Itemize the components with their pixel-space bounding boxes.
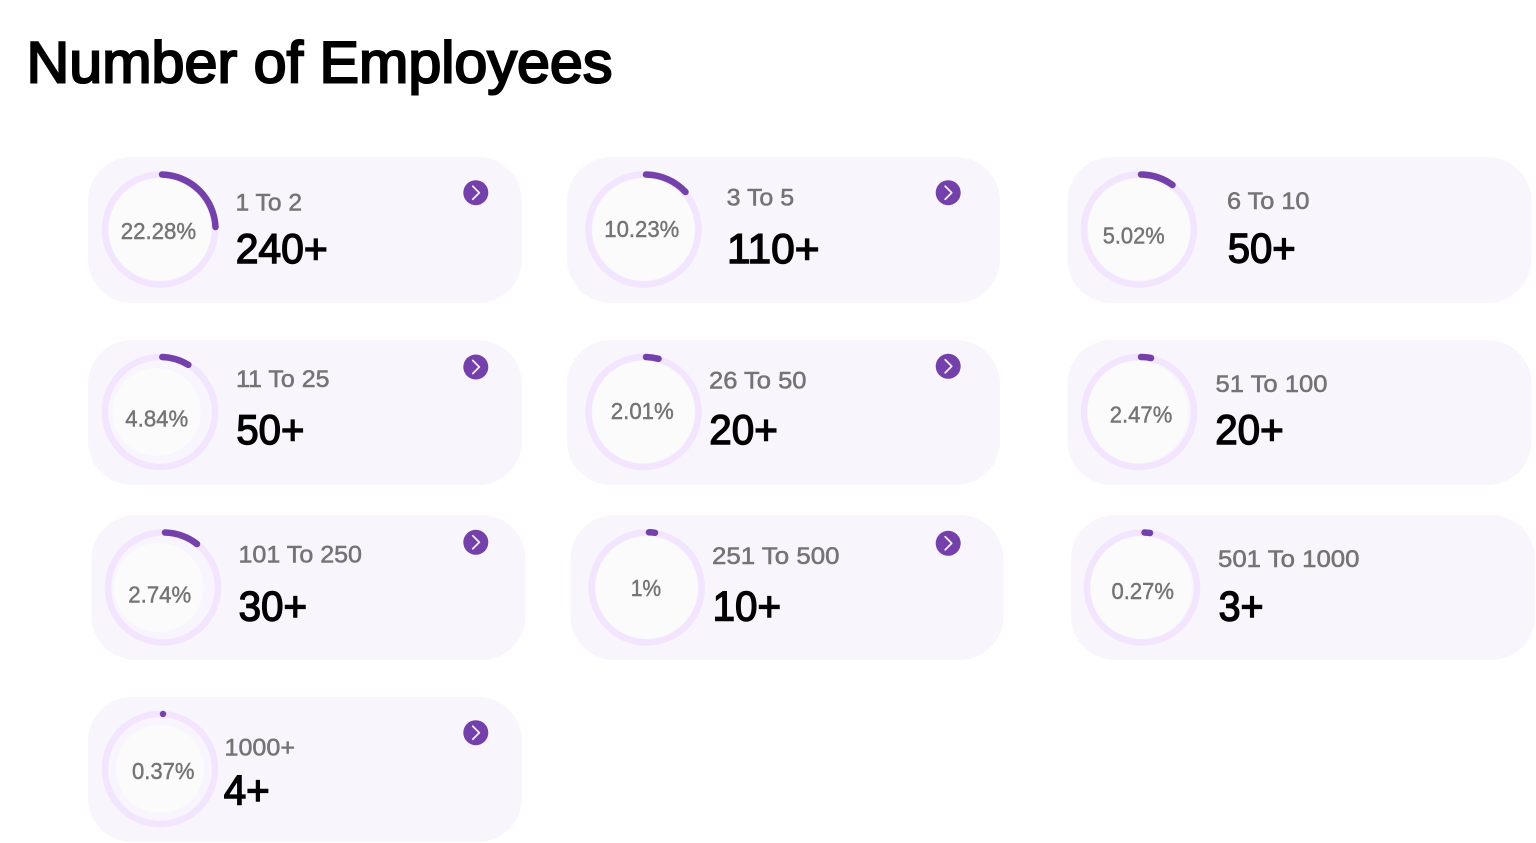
value: 20+: 20+	[709, 406, 778, 453]
icon: arrow button	[463, 354, 488, 380]
panel: 1 To 2	[88, 157, 522, 303]
percentage: 2.47%: 2.47%	[1110, 402, 1172, 428]
value: 50+: 50+	[236, 406, 304, 453]
value: 3+: 3+	[1219, 583, 1264, 630]
label: 51 To 100: 51 To 100	[1216, 371, 1328, 398]
value: 240+: 240+	[236, 225, 328, 272]
progress arc: 2.74%	[165, 532, 197, 544]
icon: arrow button	[463, 180, 488, 205]
progress arc: 0.37%	[160, 711, 166, 717]
icon: arrow button	[936, 180, 961, 205]
label: 101 To 250: 101 To 250	[238, 541, 362, 568]
label: 6 To 10: 6 To 10	[1227, 188, 1310, 215]
panel: 26 To 50	[567, 340, 1000, 485]
panel: 3 To 5	[567, 157, 1000, 303]
label: 11 To 25: 11 To 25	[236, 366, 330, 393]
percentage: 22.28%: 22.28%	[121, 218, 196, 244]
label: 501 To 1000: 501 To 1000	[1218, 546, 1360, 573]
icon: arrow button	[936, 531, 961, 556]
percentage: 1%: 1%	[631, 575, 661, 601]
panel: 1000+	[88, 697, 522, 842]
progress arc: 2.01%	[646, 357, 658, 359]
percentage: 0.27%: 0.27%	[1112, 578, 1174, 604]
value: 30+: 30+	[239, 582, 307, 630]
value: 20+: 20+	[1215, 406, 1284, 453]
progress arc: 22.28%	[162, 174, 216, 227]
progress arc: 5.02%	[1141, 174, 1172, 185]
panel: 51 To 100	[1068, 340, 1532, 485]
value: 110+: 110+	[727, 225, 820, 272]
panel: 251 To 500	[570, 515, 1004, 660]
value: 4+: 4+	[224, 766, 270, 813]
percentage: 0.37%: 0.37%	[132, 758, 194, 784]
percentage: 2.74%: 2.74%	[128, 581, 191, 607]
percentage: 2.01%: 2.01%	[611, 398, 674, 424]
icon: arrow button	[463, 720, 488, 745]
panel: 11 To 25	[88, 340, 522, 485]
value: 10+: 10+	[713, 583, 781, 630]
progress arc: 4.84%	[162, 357, 188, 365]
label: 3 To 5: 3 To 5	[727, 184, 794, 211]
icon: arrow button	[936, 354, 961, 379]
progress arc: 10.23%	[646, 174, 686, 192]
percentage: 4.84%: 4.84%	[125, 406, 188, 432]
title: Number of Employees	[26, 30, 612, 96]
icon: arrow button	[463, 530, 488, 555]
percentage: 10.23%: 10.23%	[604, 216, 679, 242]
label: 26 To 50: 26 To 50	[709, 368, 806, 394]
label: 1000+: 1000+	[224, 734, 295, 762]
panel: 501 To 1000	[1071, 515, 1535, 660]
value: 50+: 50+	[1228, 225, 1296, 272]
progress arc: 1%	[649, 529, 655, 536]
progress arc: 2.47%	[1141, 357, 1151, 358]
label: 1 To 2: 1 To 2	[236, 190, 302, 216]
panel: 101 To 250	[92, 515, 526, 660]
label: 251 To 500: 251 To 500	[712, 543, 840, 570]
progress arc: 0.27%	[1144, 529, 1150, 536]
percentage: 5.02%: 5.02%	[1103, 222, 1165, 248]
panel: 6 To 10	[1068, 157, 1532, 303]
